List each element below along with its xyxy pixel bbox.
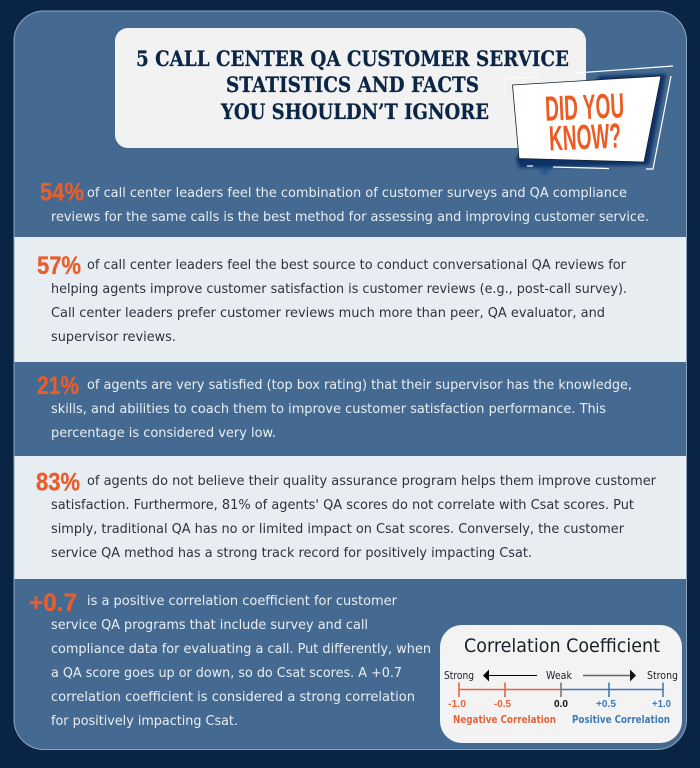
stat 2: 57%: helping agents improve customer satisfaction is customer reviews (e.g., post-call survey). <box>51 281 627 297</box>
scale labels: Strong <box>647 670 678 682</box>
arrow right <box>583 670 636 682</box>
stat 2: 57%: 57% <box>37 252 81 280</box>
scale values: -1.0 <box>448 698 466 710</box>
did you know text: DID YOU <box>544 86 625 129</box>
stat 4: 83%: satisfaction. Furthermore, 81% of agents' QA scores do not correlate with Csat scores. Put <box>51 497 634 513</box>
stat 5: +0.7: is a positive correlation coefficient for customer <box>87 593 397 609</box>
did you know text <box>544 86 625 159</box>
stat 3: 21%: of agents are very satisfied (top box rating) that their supervisor has the knowledge, <box>87 377 632 393</box>
title box <box>115 28 586 148</box>
scale labels <box>444 670 678 682</box>
negative correlation label: Negative Correlation <box>453 714 556 726</box>
title: 5 CALL CENTER QA CUSTOMER SERVICE <box>136 47 569 72</box>
stat 5: +0.7: for positively impacting Csat. <box>51 713 238 729</box>
title: STATISTICS AND FACTS <box>226 73 479 98</box>
panel: correlation coefficient <box>440 625 682 743</box>
scale labels: Weak <box>546 670 573 682</box>
band: row 4 background <box>14 456 686 579</box>
scale values: +1.0 <box>652 698 671 710</box>
stat 1: 54% <box>40 178 649 225</box>
stat 5: +0.7: compliance data for evaluating a call. Put differently, when <box>51 641 431 657</box>
stat 3: 21% <box>37 372 632 441</box>
stat 4: 83%: of agents do not believe their quality assurance program helps them improve customer <box>87 473 656 489</box>
stat 2: 57%: supervisor reviews. <box>51 329 176 345</box>
stat 4: 83%: service QA method has a strong track record for positively impacting Csat. <box>51 545 532 561</box>
scale labels: Strong <box>444 670 474 682</box>
stat 3: 21%: skills, and abilities to coach them to improve customer satisfaction performance. This <box>51 401 606 417</box>
stat 1: 54%: reviews for the same calls is the best method for assessing and improving customer service. <box>51 209 649 225</box>
stat 4: 83%: 83% <box>36 468 80 496</box>
stat 2: 57% <box>37 252 627 345</box>
title: YOU SHOULDN’T IGNORE <box>220 100 489 125</box>
stat 5: +0.7: a QA score goes up or down, so do Csat scores. A +0.7 <box>51 665 402 681</box>
stat 5: +0.7 <box>29 589 431 729</box>
correlation heading: Correlation Coefficient <box>464 635 660 657</box>
stat 1: 54%: 54% <box>40 178 84 206</box>
stat 5: +0.7: service QA programs that include survey and call <box>51 617 368 633</box>
arrow left <box>483 670 537 682</box>
stat 2: 57%: Call center leaders prefer customer reviews much more than peer, QA evaluator, and <box>51 305 605 321</box>
did you know text: KNOW? <box>548 116 622 159</box>
title <box>136 47 569 125</box>
stat 5: +0.7: correlation coefficient is considered a strong correlation <box>51 689 415 705</box>
scale values: 0.0 <box>554 698 568 710</box>
band: row 2 background <box>14 237 686 362</box>
stat 4: 83% <box>36 468 656 561</box>
stat 3: 21%: percentage is considered very low. <box>51 425 276 441</box>
stat 1: 54%: of call center leaders feel the combination of customer surveys and QA compliance <box>87 185 627 201</box>
stat 2: 57%: of call center leaders feel the best source to conduct conversational QA reviews for <box>87 257 626 273</box>
scale values: -0.5 <box>494 698 511 710</box>
scale values <box>448 698 671 710</box>
scale values: +0.5 <box>596 698 616 710</box>
stat 3: 21%: 21% <box>37 372 79 400</box>
stat 5: +0.7: +0.7 <box>29 589 77 617</box>
stat 4: 83%: simply, traditional QA has no or limited impact on Csat scores. Conversely, the customer <box>51 521 624 537</box>
positive correlation label: Positive Correlation <box>572 714 670 726</box>
scale bar <box>459 682 663 697</box>
icon: did you know speech bubble <box>505 66 673 177</box>
